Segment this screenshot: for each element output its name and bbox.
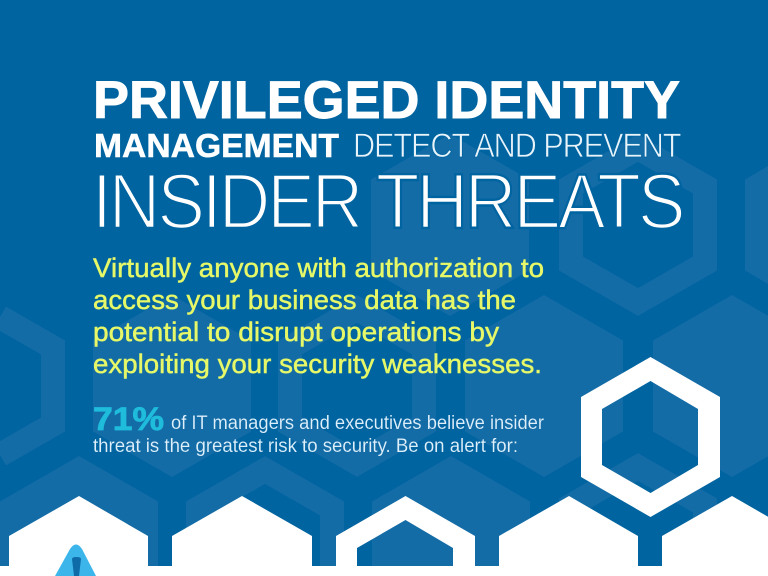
title line 3: INSIDER THREATS bbox=[92, 157, 683, 245]
background hexagon pattern bbox=[0, 134, 768, 566]
hexagon 2 bbox=[172, 496, 312, 567]
white footer band with hexagons bbox=[0, 496, 768, 576]
hexagon ring bbox=[581, 357, 720, 517]
hexagon 4 bbox=[499, 496, 638, 567]
hexagon 5 bbox=[662, 496, 768, 567]
title line 2 bold: MANAGEMENT bbox=[94, 128, 340, 165]
statistic line 2: threat is the greatest risk to security. Be on alert for: bbox=[93, 436, 518, 457]
yellow intro paragraph: access your business data has the bbox=[93, 285, 516, 315]
yellow intro paragraph: potential to disrupt operations by bbox=[93, 317, 500, 347]
title bbox=[92, 71, 683, 245]
hexagon 3 ring bbox=[336, 496, 475, 567]
71 percent figure: 71% bbox=[93, 401, 164, 437]
yellow intro paragraph: exploiting your security weaknesses. bbox=[93, 349, 542, 379]
yellow intro paragraph bbox=[93, 253, 544, 379]
title line 2 light: DETECT AND PREVENT bbox=[353, 127, 682, 164]
title line 1: PRIVILEGED IDENTITY bbox=[93, 71, 680, 130]
statistic text bbox=[93, 401, 545, 457]
statistic line 1: of IT managers and executives believe insider bbox=[171, 413, 545, 434]
yellow intro paragraph: Virtually anyone with authorization to bbox=[93, 253, 544, 283]
icon: exclamation mark bbox=[72, 557, 81, 576]
hexagon 1 bbox=[9, 496, 148, 567]
icon: warning triangle bbox=[55, 544, 96, 576]
